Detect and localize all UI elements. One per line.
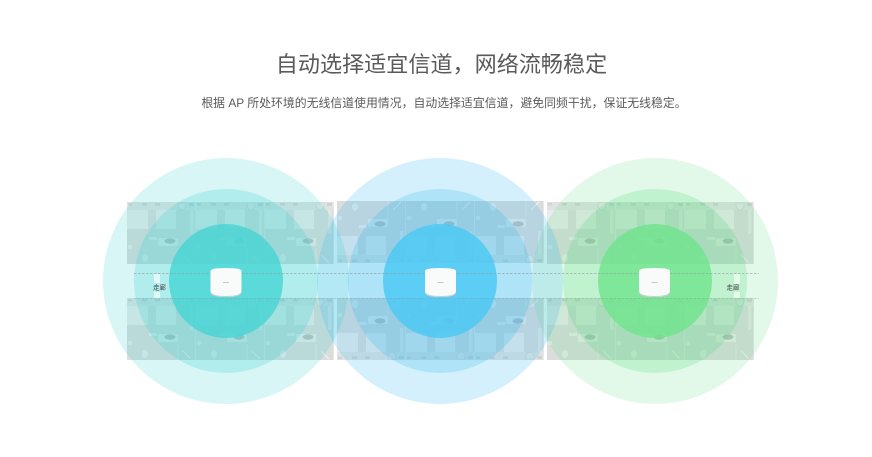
corridor markers <box>154 274 740 298</box>
signal coverage: green <box>532 158 778 404</box>
corridor dashed lines <box>134 274 759 298</box>
access point right <box>639 268 670 297</box>
floor plan rooms: lower row <box>127 298 754 360</box>
access point left <box>210 268 242 297</box>
signal coverage: blue <box>317 158 563 404</box>
access point middle <box>425 268 456 297</box>
subtitle text: 根据 AP 所处环境的无线信道使用情况，自动选择适宜信道，避免同频干扰，保证无线稳定。 <box>201 96 687 110</box>
title: 自动选择适宜信道，网络流畅稳定 <box>276 52 607 77</box>
floor plan rooms: upper row <box>127 201 754 264</box>
corridor label left: 走廊 <box>153 282 166 292</box>
signal coverage: teal <box>103 158 349 404</box>
corridor label right: 走廊 <box>726 282 740 292</box>
